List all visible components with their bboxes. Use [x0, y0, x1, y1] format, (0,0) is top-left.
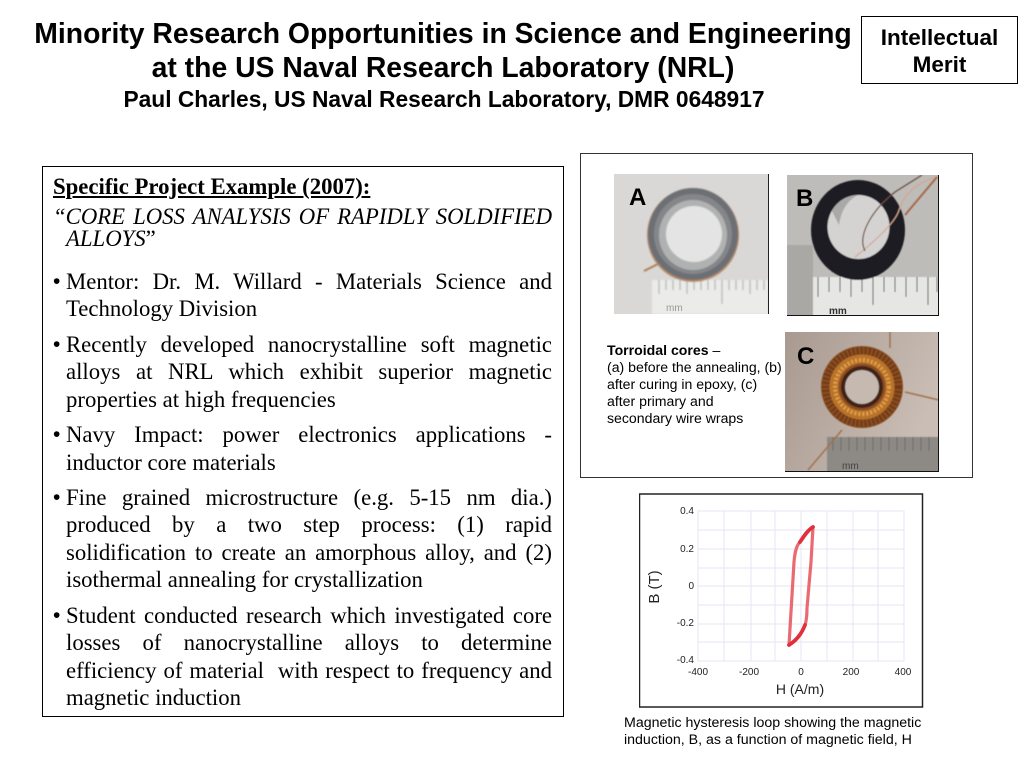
- project title: “CORE LOSS ANALYSIS OF RAPIDLY SOLDIFIED: [53, 204, 552, 229]
- chart: magnetic hysteresis loop: 0.2: [680, 544, 694, 555]
- chart: magnetic hysteresis loop: 0: [798, 667, 804, 678]
- bullet: student research: [53, 603, 552, 710]
- photo C: core after wire wraps: mm: [842, 461, 859, 472]
- toroidal cores caption: [607, 342, 782, 426]
- photo B: core after curing in epoxy: B: [796, 185, 813, 212]
- chart: magnetic hysteresis loop: -200: [739, 667, 759, 678]
- chart: magnetic hysteresis loop: 0: [688, 581, 694, 592]
- project title: [53, 204, 552, 251]
- photo A: core before annealing: A: [629, 184, 646, 211]
- bullet: student research: losses of nanocrystalline alloys to determine: [66, 630, 552, 655]
- bullet: fine grained: produced by a two step process: (1) rapid: [66, 512, 552, 537]
- chart: magnetic hysteresis loop: 0.4: [680, 506, 694, 517]
- hysteresis caption: Magnetic hysteresis loop showing the magnetic: [624, 715, 921, 731]
- chart: magnetic hysteresis loop: [639, 493, 924, 708]
- photo A: core before annealing: [614, 174, 769, 314]
- photo A: core before annealing: mm: [666, 303, 683, 314]
- title: at the US Naval Research Laboratory (NRL): [152, 52, 734, 84]
- bullet: fine grained: •: [53, 486, 60, 509]
- intellectual merit badge: Intellectual: [881, 25, 998, 50]
- bullet: student research: magnetic induction: [66, 685, 241, 710]
- bullet: mentor: •: [53, 270, 60, 293]
- bullet: navy impact: Navy Impact: power electronics applications -: [66, 422, 552, 447]
- hysteresis caption: [624, 715, 921, 748]
- toroidal cores caption: after primary and: [607, 393, 714, 409]
- bullet: navy impact: [53, 422, 552, 475]
- bullet: recently developed: Recently developed nanocrystalline soft magnetic: [66, 332, 552, 357]
- toroidal cores caption: Torroidal cores –: [607, 342, 720, 358]
- bullet: fine grained: Fine grained microstructure (e.g. 5-15 nm dia.): [66, 485, 552, 510]
- toroidal cores caption: secondary wire wraps: [607, 410, 743, 426]
- panel: specific project example: [42, 166, 564, 717]
- bullet: recently developed: [53, 332, 552, 412]
- bullet: recently developed: properties at high frequencies: [66, 387, 336, 412]
- bullet: navy impact: •: [53, 423, 60, 446]
- chart: magnetic hysteresis loop: -0.4: [677, 655, 694, 666]
- toroidal cores caption: after curing in epoxy, (c): [607, 376, 757, 392]
- bullet: mentor: [53, 269, 552, 321]
- chart: magnetic hysteresis loop: -0.2: [677, 618, 694, 629]
- photo C: core after wire wraps: [785, 332, 939, 472]
- bullet: recently developed: alloys at NRL which exhibit superior magnetic: [66, 359, 552, 384]
- intellectual merit badge: Merit: [913, 52, 966, 77]
- chart: magnetic hysteresis loop: H (A/m): [776, 681, 824, 697]
- toroidal cores caption: (a) before the annealing, (b): [607, 359, 782, 375]
- bullet: fine grained: solidification to create an amorphous alloy, and (2): [66, 540, 552, 565]
- bullet: fine grained: isothermal annealing for crystallization: [66, 567, 423, 592]
- photo C: core after wire wraps: C: [797, 343, 814, 370]
- project title: ALLOYS”: [66, 226, 156, 251]
- bullet: student research: Student conducted research which investigated core: [66, 603, 552, 628]
- chart: magnetic hysteresis loop: 400: [895, 667, 912, 678]
- bullet: recently developed: •: [53, 333, 60, 356]
- project heading: Specific Project Example (2007):: [53, 174, 370, 199]
- bullet: mentor: Technology Division: [66, 296, 257, 321]
- bullet: student research: efficiency of material with respect to frequency and: [66, 658, 552, 683]
- hysteresis caption: induction, B, as a function of magnetic field, H: [624, 732, 912, 748]
- chart: magnetic hysteresis loop: -400: [688, 667, 708, 678]
- photo B: core after curing in epoxy: [787, 175, 939, 316]
- bullet: student research: •: [53, 604, 60, 627]
- title: Paul Charles, US Naval Research Laboratory, DMR 0648917: [123, 86, 765, 112]
- intellectual merit badge: [861, 16, 1018, 84]
- bullet: mentor: Mentor: Dr. M. Willard - Materials Science and: [66, 269, 552, 294]
- title: Minority Research Opportunities in Science and Engineering: [34, 18, 852, 50]
- chart: magnetic hysteresis loop: B (T): [646, 570, 663, 604]
- bullet: fine grained: [53, 485, 552, 592]
- bullet: navy impact: inductor core materials: [66, 450, 276, 475]
- title: [34, 18, 852, 112]
- chart: magnetic hysteresis loop: 200: [843, 667, 860, 678]
- panel: toroidal cores: [580, 153, 973, 478]
